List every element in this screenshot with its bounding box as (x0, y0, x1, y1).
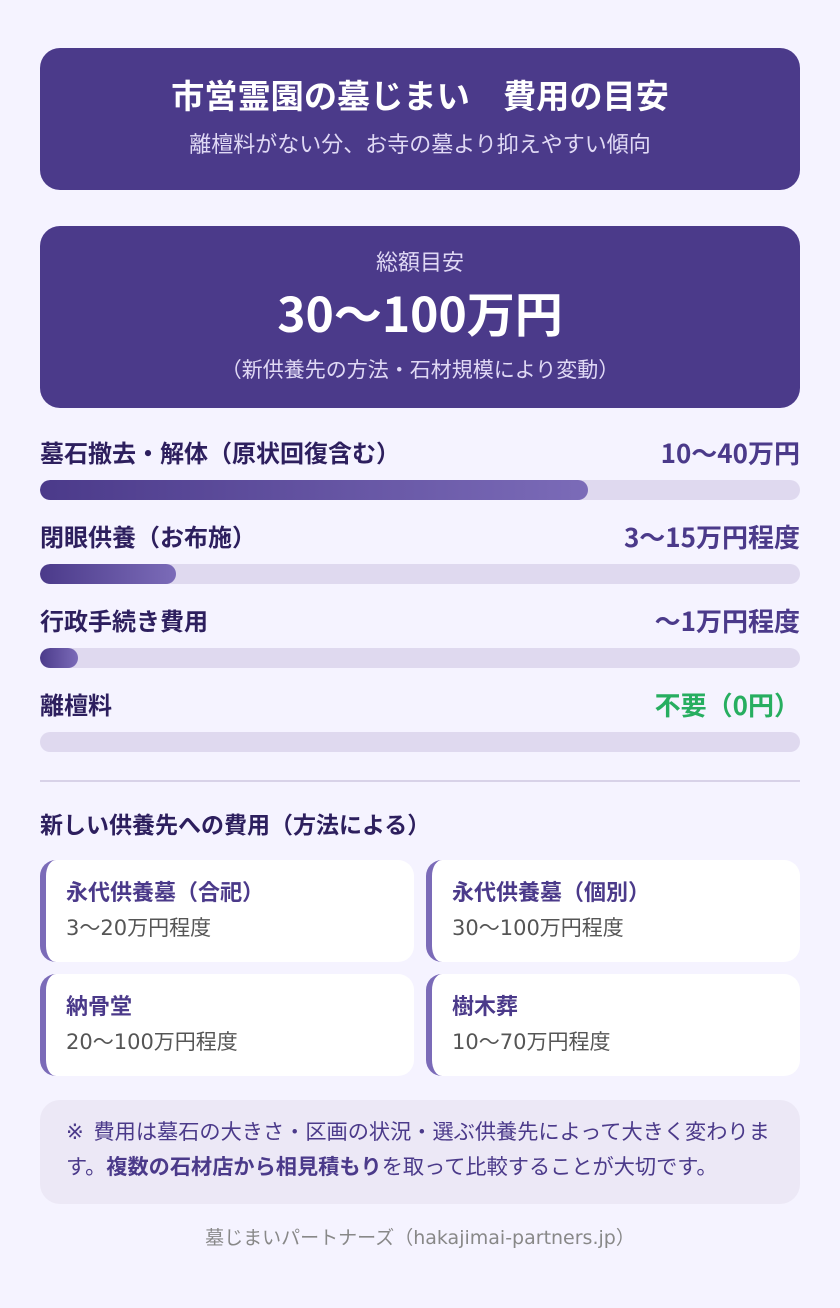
card title: 樹木葬 (452, 989, 518, 1021)
callout note (40, 1100, 800, 1204)
value: 〜1万円程度 (655, 602, 800, 639)
card: shared memorial grave (40, 860, 414, 962)
value: 不要（0円） (655, 686, 800, 723)
subtitle: 離檀料がない分、お寺の墓より抑えやすい傾向 (189, 133, 651, 158)
label: 行政手続き費用 (40, 602, 208, 637)
cost row: administrative fees (40, 602, 800, 668)
card price: 3〜20万円程度 (66, 916, 211, 940)
total label: 総額目安 (376, 251, 464, 276)
card title: 納骨堂 (66, 989, 132, 1021)
cost row: eye-closing ceremony (40, 518, 800, 584)
card: columbarium (40, 974, 414, 1076)
bar (40, 732, 800, 752)
footer credit: 墓じまいパートナーズ（hakajimai-partners.jp） (205, 1227, 635, 1249)
section heading: 新しい供養先への費用（方法による） (40, 806, 430, 840)
panel: total estimate (40, 226, 800, 408)
value: 10〜40万円 (661, 434, 800, 471)
value: 3〜15万円程度 (624, 518, 800, 555)
card: tree burial (426, 974, 800, 1076)
card title: 永代供養墓（合祀） (66, 875, 264, 907)
card price: 30〜100万円程度 (452, 916, 624, 940)
title: 市営霊園の墓じまい 費用の目安 (171, 69, 669, 118)
bar (40, 648, 800, 668)
label: 閉眼供養（お布施） (40, 518, 256, 553)
bar (40, 480, 800, 500)
bar (40, 564, 800, 584)
card: individual memorial grave (426, 860, 800, 962)
cost row: temple leaving fee (40, 686, 800, 752)
card title: 永代供養墓（個別） (452, 875, 650, 907)
cost row: removal (40, 434, 800, 500)
label: 墓石撤去・解体（原状回復含む） (40, 434, 400, 469)
total note: （新供養先の方法・石材規模により変動） (221, 358, 619, 382)
header panel (40, 48, 800, 190)
callout note: ※ 費用は墓石の大きさ・区画の状況・選ぶ供養先によって大きく変わります。複数の石材店から相見積もりを取って比較することが大切です。 (66, 1119, 770, 1181)
card price: 20〜100万円程度 (66, 1030, 238, 1054)
card price: 10〜70万円程度 (452, 1030, 610, 1054)
total amount: 30〜100万円 (277, 276, 563, 346)
label: 離檀料 (40, 686, 112, 721)
